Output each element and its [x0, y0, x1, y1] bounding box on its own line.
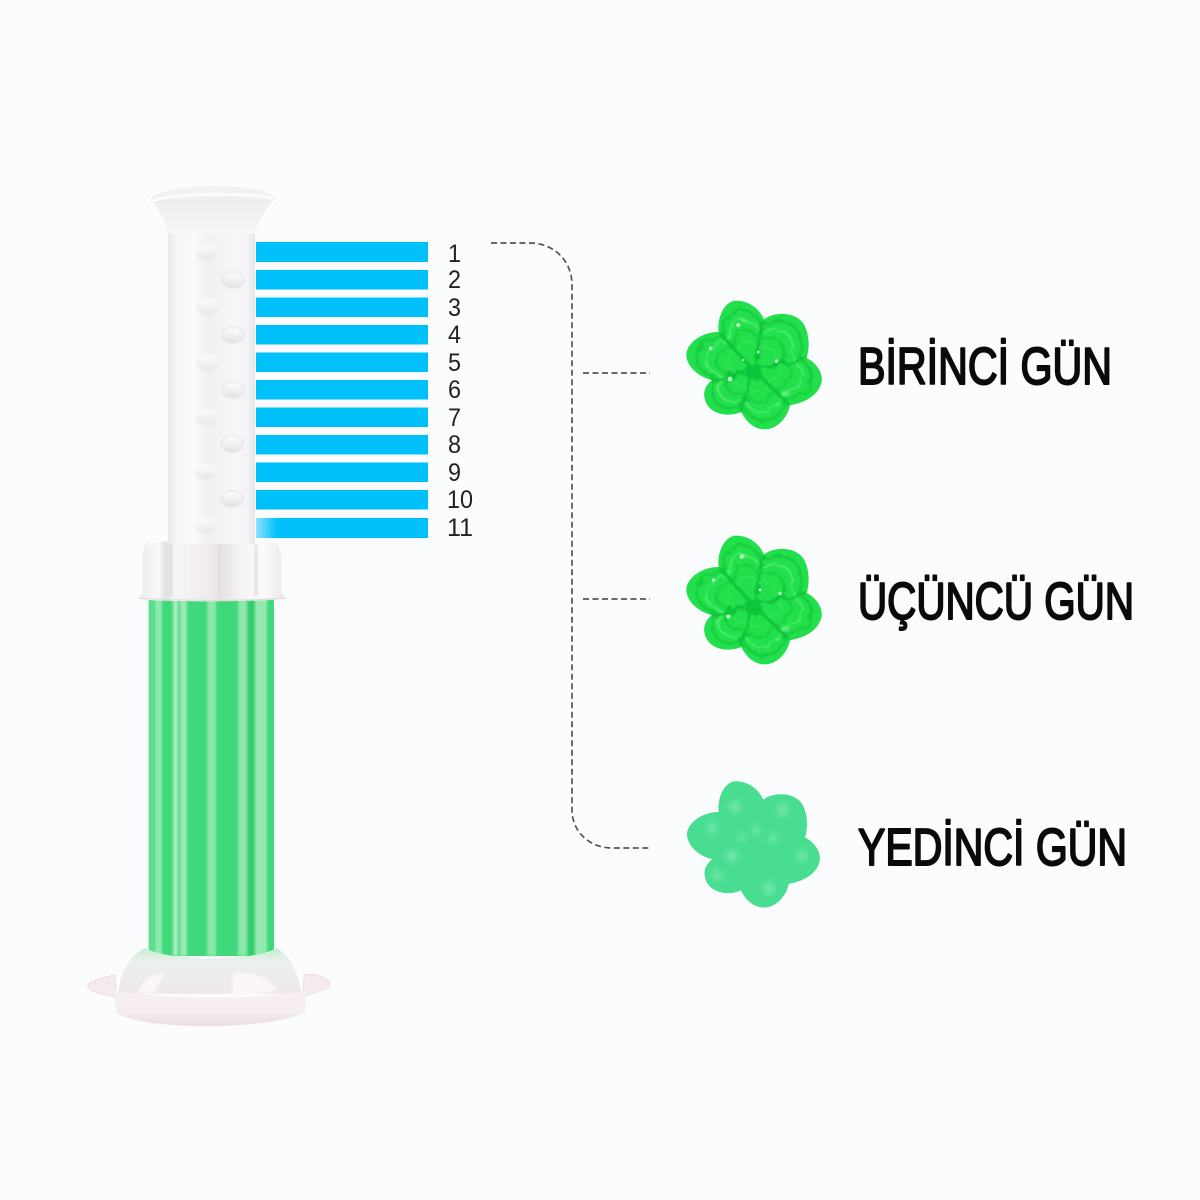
bar numbers: 7: [448, 404, 461, 432]
bar numbers: 8: [448, 431, 461, 459]
bar numbers: 5: [448, 349, 461, 377]
icon: gel flower day 7: [687, 781, 820, 907]
bar numbers: 10: [447, 486, 473, 514]
white base with tabs: [88, 948, 330, 1026]
bar numbers: 4: [448, 321, 461, 349]
label: yedinci gün: YEDİNCİ GÜN: [858, 819, 1127, 877]
gel applicator product: [88, 186, 330, 1026]
tube bumps: [194, 244, 244, 534]
bar numbers: 1: [448, 240, 461, 268]
collar cap: [138, 541, 286, 601]
bar numbers: 3: [448, 294, 461, 322]
green gel barrel: [149, 598, 274, 956]
infographic canvas: [87, 186, 1132, 1026]
dashed bracket connector: [491, 243, 650, 848]
label: birinci gün: BİRİNCİ GÜN: [858, 338, 1112, 396]
bar numbers: 6: [448, 376, 461, 404]
icon: gel flower day 1: [686, 301, 822, 429]
bar numbers: 2: [448, 266, 461, 294]
measurement bars 1 to 11: [256, 242, 428, 538]
upper tube with flared rim: [150, 186, 275, 544]
bar numbers: 11: [447, 514, 473, 542]
bar numbers: [447, 240, 473, 542]
icon: gel flower day 3: [686, 536, 822, 664]
bar numbers: 9: [448, 459, 461, 487]
